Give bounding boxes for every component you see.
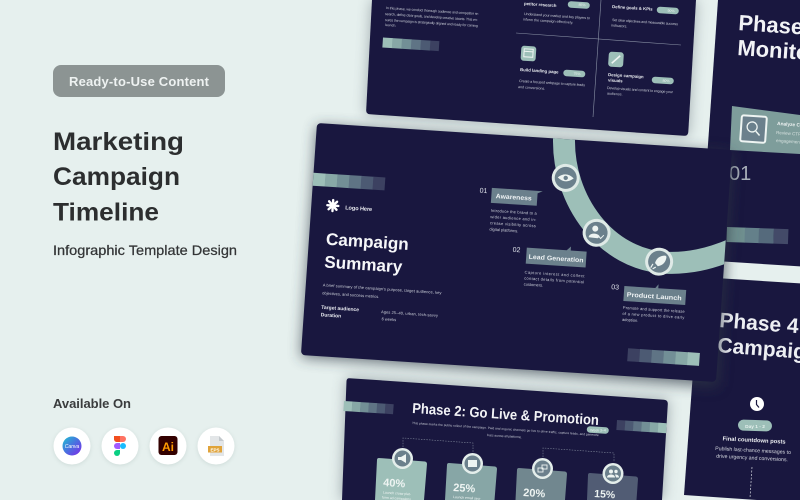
colour strip bbox=[726, 227, 788, 244]
heading: phase 4 bbox=[717, 309, 800, 365]
colour strip left bbox=[343, 401, 394, 414]
item: market research: 85% bbox=[578, 3, 586, 7]
step 01 bbox=[477, 187, 543, 235]
icon: brush bbox=[608, 52, 624, 67]
item: define goals: Set clear objectives and measurable success bbox=[612, 18, 678, 26]
summary details: Ages 25–40, urban, tech-savvy bbox=[381, 309, 438, 318]
label: lead generation: Lead Generation bbox=[528, 254, 584, 264]
description: This phase marks the public rollout of the campaign. Paid and organic channels go live to drive traffic, capture leads, and generate bbox=[412, 421, 599, 437]
item: landing page: and conversions. bbox=[518, 85, 545, 91]
intro text: sures the campaign is strategically aligned and ready for coming bbox=[385, 18, 478, 28]
icon: logo star bbox=[327, 200, 339, 211]
text bbox=[524, 270, 586, 290]
summary details bbox=[321, 305, 438, 326]
panel: right slide, phase 3 monitor bbox=[700, 0, 800, 266]
text: contact details from potential bbox=[524, 276, 584, 284]
timeline arc bbox=[556, 137, 740, 267]
item: market research: inform the campaign effectively. bbox=[523, 18, 573, 25]
item: design visuals bbox=[607, 52, 674, 97]
item: define goals: Define goals & KPIs bbox=[612, 4, 653, 12]
panel: main slide shadow bbox=[301, 126, 732, 387]
icon: eps file: EPS bbox=[210, 448, 220, 452]
item: landing page bbox=[518, 46, 585, 91]
description: buzz across all platforms. bbox=[487, 433, 522, 439]
card 25%: 25% bbox=[453, 482, 476, 495]
item: design visuals: audience. bbox=[607, 92, 623, 97]
text: digital platforms. bbox=[489, 227, 519, 233]
panel: top slide, research phase bbox=[366, 0, 696, 136]
badge: ready-to-use content bbox=[53, 65, 225, 97]
milestone text bbox=[715, 436, 791, 463]
milestone text: drive urgency and conversions. bbox=[716, 454, 788, 463]
title: Timeline bbox=[53, 198, 159, 226]
icon: figma bbox=[102, 428, 138, 466]
icon: canva: Canva bbox=[65, 444, 79, 450]
week pill: Week 3–4 bbox=[590, 428, 606, 432]
title bbox=[53, 128, 184, 226]
description: A brief summary of the campaign's purpose, target audience, key bbox=[323, 282, 442, 295]
item: market research bbox=[523, 1, 590, 25]
grid dividers bbox=[516, 0, 681, 117]
item: design visuals: 80% bbox=[662, 79, 670, 83]
item: landing page: Build landing page bbox=[520, 67, 559, 75]
text: crease visibility across bbox=[490, 220, 536, 228]
text bbox=[622, 305, 686, 326]
number 01: 01 bbox=[729, 163, 751, 185]
text: customers. bbox=[524, 281, 543, 288]
step 03: 03 bbox=[611, 284, 619, 292]
description bbox=[322, 282, 442, 303]
card 15% bbox=[587, 463, 638, 500]
item: design visuals: Design campaign bbox=[608, 72, 644, 79]
text: wider audience and in- bbox=[490, 214, 537, 222]
intro text: launch. bbox=[385, 23, 396, 28]
item: landing page: 75% bbox=[573, 72, 581, 76]
heading: campaign summary bbox=[324, 230, 409, 277]
label: awareness: Awareness bbox=[496, 193, 532, 202]
item: design visuals: visuals bbox=[608, 78, 623, 83]
subtitle: Infographic Template Design bbox=[53, 242, 237, 258]
title: Marketing bbox=[53, 128, 184, 156]
title: Campaign bbox=[53, 163, 180, 191]
dashed connectors bbox=[403, 438, 614, 462]
intro text: search, define clear goals, and develop creative assets. This en- bbox=[385, 12, 479, 22]
text bbox=[489, 208, 538, 235]
heading: phase 3 bbox=[737, 10, 800, 66]
analyze band bbox=[730, 106, 800, 154]
step 01: 01 bbox=[479, 188, 488, 195]
icon: eye bbox=[551, 163, 581, 193]
colour strip bbox=[382, 38, 439, 51]
card 40%: 40% bbox=[383, 477, 406, 490]
item: market research: Understand your market and key players to bbox=[524, 12, 590, 20]
icon: illustrator bbox=[150, 428, 186, 466]
week pill bbox=[587, 426, 609, 434]
icon: illustrator: Ai bbox=[162, 440, 174, 454]
description: objectives, and success metrics. bbox=[322, 290, 380, 299]
item: define goals: indicators. bbox=[611, 24, 628, 29]
colour strip bottom right bbox=[627, 348, 700, 366]
item: define goals bbox=[611, 4, 679, 29]
heading: Phase 2: Go Live & Promotion bbox=[412, 401, 599, 429]
text: adoption. bbox=[622, 317, 639, 323]
intro text bbox=[385, 6, 480, 28]
icon: canva bbox=[54, 428, 90, 466]
icon: person check bbox=[582, 218, 612, 248]
item: define goals: 90% bbox=[667, 9, 675, 13]
panel: lower right slide, phase 4 campaign bbox=[684, 277, 800, 500]
day pill bbox=[738, 419, 772, 432]
step 02 bbox=[510, 243, 587, 290]
colour strip right bbox=[616, 420, 667, 433]
badge: ready-to-use content: Ready-to-Use Content bbox=[69, 74, 210, 89]
day pill: Day 1 - 2 bbox=[745, 424, 765, 430]
item: landing page: Create a focused webpage to capture leads bbox=[519, 79, 585, 87]
card 25% bbox=[445, 453, 497, 500]
summary details: 6 weeks bbox=[381, 316, 396, 322]
item: design visuals: Develop visuals and content to engage your bbox=[607, 86, 674, 94]
text: Capture interest and collect bbox=[524, 270, 586, 278]
logo: Logo Here bbox=[345, 205, 372, 213]
panel: bottom slide, phase 2 go live bbox=[342, 378, 668, 500]
text: of a new product to drive early bbox=[622, 311, 684, 320]
heading: campaign summary: Summary bbox=[324, 253, 403, 277]
icon: landing page bbox=[520, 46, 536, 61]
summary details: Duration bbox=[321, 312, 341, 320]
intro text: In this phase, we conduct thorough audience and competitor re- bbox=[386, 6, 480, 16]
milestone text: Publish last-chance messages to bbox=[715, 446, 791, 456]
heading: available on: Available On bbox=[53, 396, 131, 411]
item: market research: petitor research bbox=[524, 1, 557, 8]
text: Promote and support the release bbox=[623, 305, 686, 314]
icon: clock bbox=[750, 397, 764, 411]
step 03 bbox=[609, 281, 687, 326]
step 02: 02 bbox=[512, 247, 521, 254]
colour strip top left bbox=[313, 173, 385, 190]
text: Introduce the brand to a bbox=[491, 208, 538, 216]
heading: campaign summary: Campaign bbox=[325, 230, 409, 254]
panel: campaign summary main slide bbox=[301, 121, 740, 383]
icon: rocket bbox=[644, 247, 674, 277]
card 40% bbox=[375, 448, 427, 500]
milestone text: Final countdown posts bbox=[722, 436, 786, 446]
icon: eps file bbox=[198, 428, 234, 466]
label: product launch: Product Launch bbox=[626, 292, 682, 302]
card 40%: Launch cross-plat- bbox=[383, 491, 411, 496]
icon: analyze bbox=[740, 115, 767, 143]
summary details: Target audience bbox=[321, 305, 359, 313]
logo bbox=[327, 200, 373, 214]
card 20% bbox=[516, 458, 567, 500]
